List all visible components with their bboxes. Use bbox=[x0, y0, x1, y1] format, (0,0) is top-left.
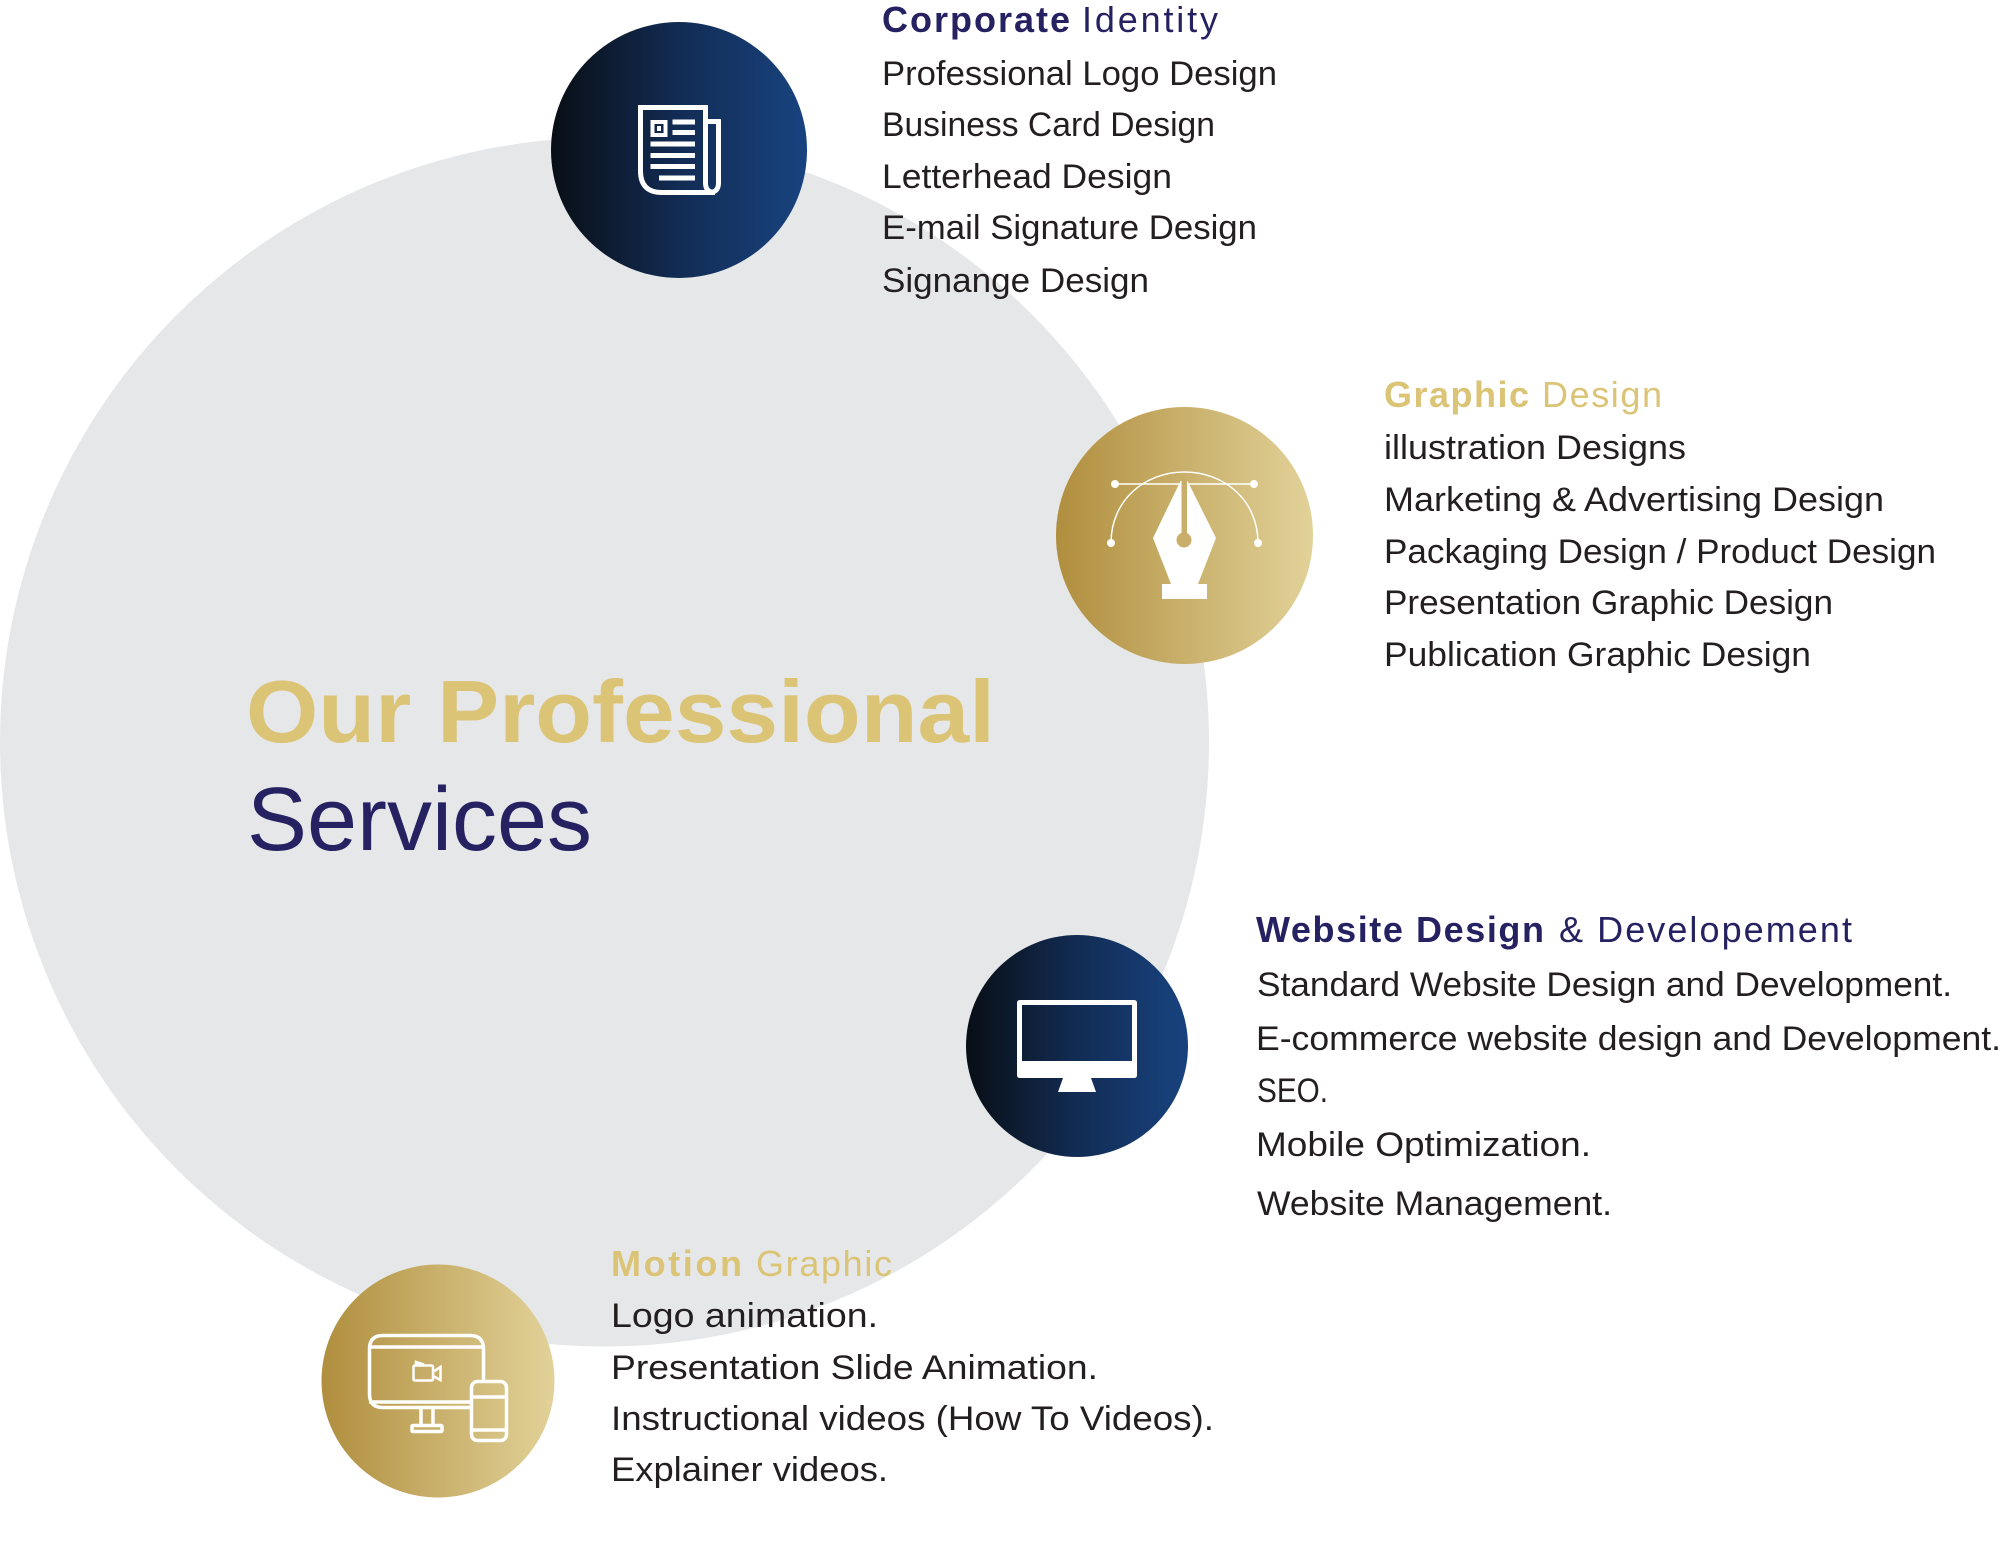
background circle bbox=[0, 138, 1209, 1346]
heading: graphic design: Graphic bbox=[1384, 374, 1529, 415]
icon: monitor and phone video bbox=[322, 1264, 554, 1498]
panel: graphic design bbox=[1056, 374, 1936, 674]
list: graphic design bbox=[1384, 429, 1936, 674]
list: motion graphic: Logo animation. bbox=[611, 1297, 878, 1335]
panel: website design bbox=[966, 909, 2001, 1223]
list: corporate identity bbox=[882, 55, 1277, 300]
heading: corporate identity: Identity bbox=[1082, 0, 1218, 40]
list: corporate identity: Letterhead Design bbox=[882, 158, 1172, 196]
icon: pen tool bbox=[1056, 407, 1313, 664]
title: Services bbox=[247, 770, 592, 870]
heading: corporate identity: Corporate bbox=[882, 0, 1070, 40]
heading: website design: Website Design bbox=[1256, 909, 1544, 950]
heading: graphic design bbox=[1384, 374, 1662, 415]
list: graphic design: illustration Designs bbox=[1384, 429, 1686, 467]
heading: graphic design: Design bbox=[1542, 374, 1662, 415]
list: graphic design: Marketing & Advertising Design bbox=[1384, 481, 1884, 519]
heading: motion graphic: Graphic bbox=[756, 1243, 892, 1284]
list: motion graphic bbox=[611, 1297, 1214, 1489]
heading: website design bbox=[1256, 909, 1852, 950]
panel: corporate identity bbox=[551, 0, 1277, 300]
list: graphic design: Packaging Design / Product Design bbox=[1384, 533, 1936, 571]
list: graphic design: Presentation Graphic Design bbox=[1384, 584, 1833, 622]
list: website design: Standard Website Design and Development. bbox=[1257, 966, 1952, 1004]
heading: website design: & Developement bbox=[1559, 909, 1852, 950]
heading: corporate identity bbox=[882, 0, 1218, 40]
list: corporate identity: E-mail Signature Design bbox=[882, 209, 1257, 247]
list: graphic design: Publication Graphic Design bbox=[1384, 636, 1811, 674]
list: website design: Website Management. bbox=[1257, 1185, 1612, 1223]
icon: newspaper bbox=[551, 22, 807, 278]
list: corporate identity: Signange Design bbox=[882, 262, 1149, 300]
panel: motion graphic bbox=[322, 1243, 1214, 1498]
list: website design: E-commerce website design and Development. bbox=[1256, 1020, 2001, 1058]
list: corporate identity: Professional Logo Design bbox=[882, 55, 1277, 93]
list: corporate identity: Business Card Design bbox=[882, 106, 1215, 144]
title: Our Professional bbox=[246, 662, 995, 761]
list: motion graphic: Presentation Slide Animation. bbox=[611, 1349, 1098, 1387]
icon: desktop monitor bbox=[966, 935, 1188, 1157]
list: website design: Mobile Optimization. bbox=[1256, 1126, 1591, 1164]
heading: motion graphic bbox=[611, 1243, 892, 1284]
list: website design bbox=[1256, 966, 2001, 1223]
list: motion graphic: Instructional videos (How To Videos). bbox=[611, 1400, 1214, 1438]
heading: motion graphic: Motion bbox=[611, 1243, 742, 1284]
list: website design: SEO. bbox=[1257, 1072, 1328, 1110]
list: motion graphic: Explainer videos. bbox=[611, 1451, 888, 1489]
title bbox=[246, 662, 995, 870]
